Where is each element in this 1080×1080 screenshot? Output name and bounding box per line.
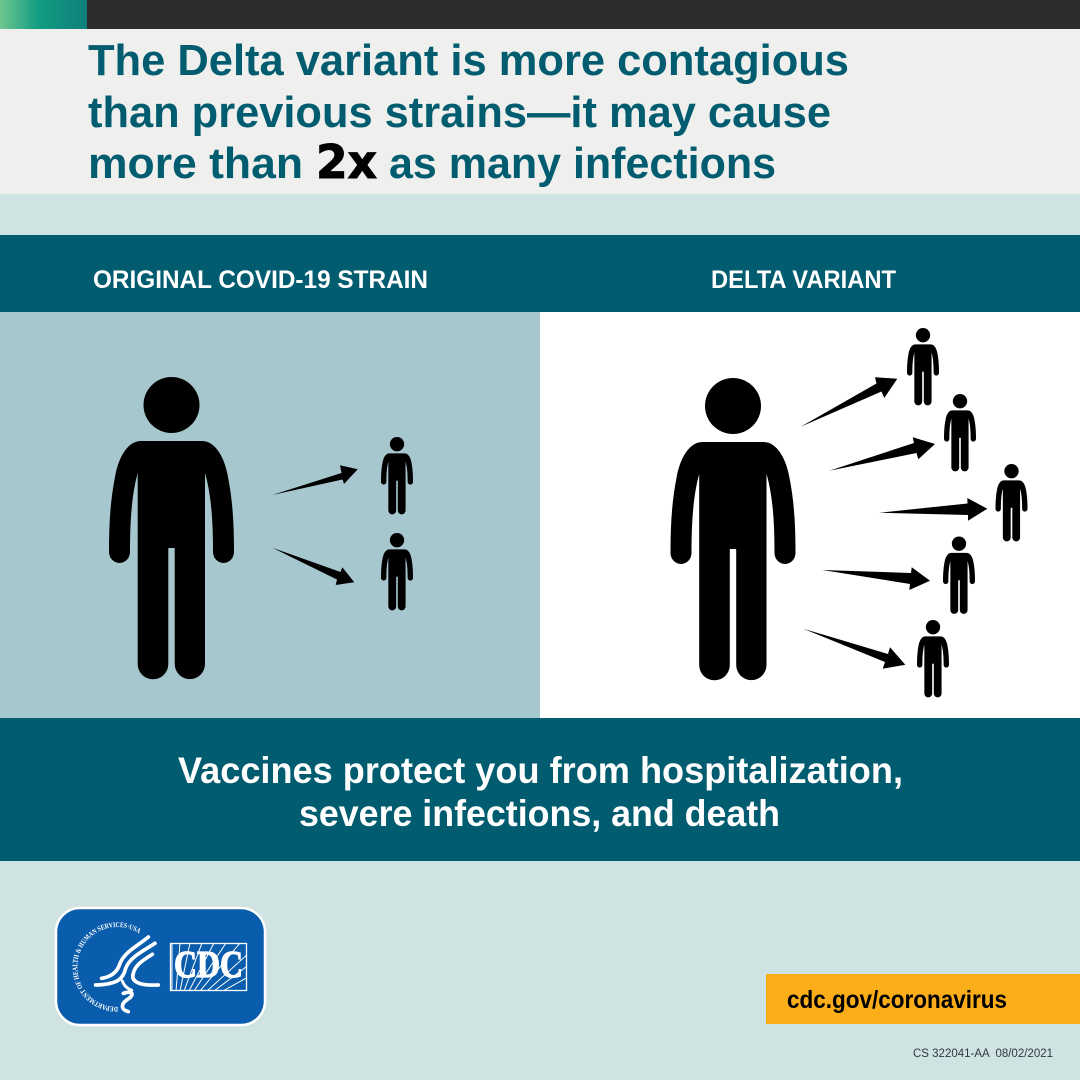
arrow 5 xyxy=(803,629,905,669)
publication code: CS 322041-AA 08/02/2021 xyxy=(913,1048,1053,1060)
url text: cdc.gov/coronavirus xyxy=(787,986,1007,1014)
icon: small person 4 xyxy=(943,536,975,614)
icon: small person 3 xyxy=(996,464,1028,541)
header band xyxy=(0,235,1080,312)
url callout xyxy=(766,974,1080,1024)
panel: original strain xyxy=(0,312,540,718)
title: as many infections xyxy=(389,139,776,188)
title xyxy=(88,36,849,189)
icon: small person 5 xyxy=(917,620,949,697)
icon: small person 2 xyxy=(944,394,976,471)
HHS eagle xyxy=(96,937,158,1012)
panel: delta variant xyxy=(540,312,1080,718)
title panel xyxy=(0,29,1080,194)
logo: HHS and CDC xyxy=(54,906,266,1026)
message text: severe infections, and death xyxy=(299,793,780,834)
icon: large person xyxy=(109,377,234,679)
heading: original strain: ORIGINAL COVID-19 STRAIN xyxy=(93,266,428,294)
title: The Delta variant is more contagious xyxy=(88,36,849,85)
message band xyxy=(0,718,1080,861)
arrow 1 xyxy=(801,377,897,427)
icon: large person xyxy=(670,378,796,680)
message text xyxy=(178,750,903,834)
icon: small person upper xyxy=(381,437,413,514)
arrow: lower xyxy=(272,548,354,585)
title: more than xyxy=(88,139,303,188)
heading: delta variant: DELTA VARIANT xyxy=(711,266,896,294)
message text: Vaccines protect you from hospitalization, xyxy=(178,750,903,791)
arrow 3 xyxy=(879,498,987,521)
arrow 2 xyxy=(829,437,935,471)
top bar xyxy=(0,0,1080,29)
arrow 4 xyxy=(822,567,930,590)
CDC letters: CDC xyxy=(174,944,243,986)
HHS circular seal text: DEPARTMENT OF HEALTH & HUMAN SERVICES·USA xyxy=(72,922,140,1012)
CDC mark xyxy=(170,943,250,991)
icon: small person lower xyxy=(381,533,413,610)
title: 2x xyxy=(316,135,377,189)
arrow: upper xyxy=(272,465,358,495)
title: than previous strains—it may cause xyxy=(88,88,831,137)
icon: small person 1 xyxy=(907,328,939,405)
